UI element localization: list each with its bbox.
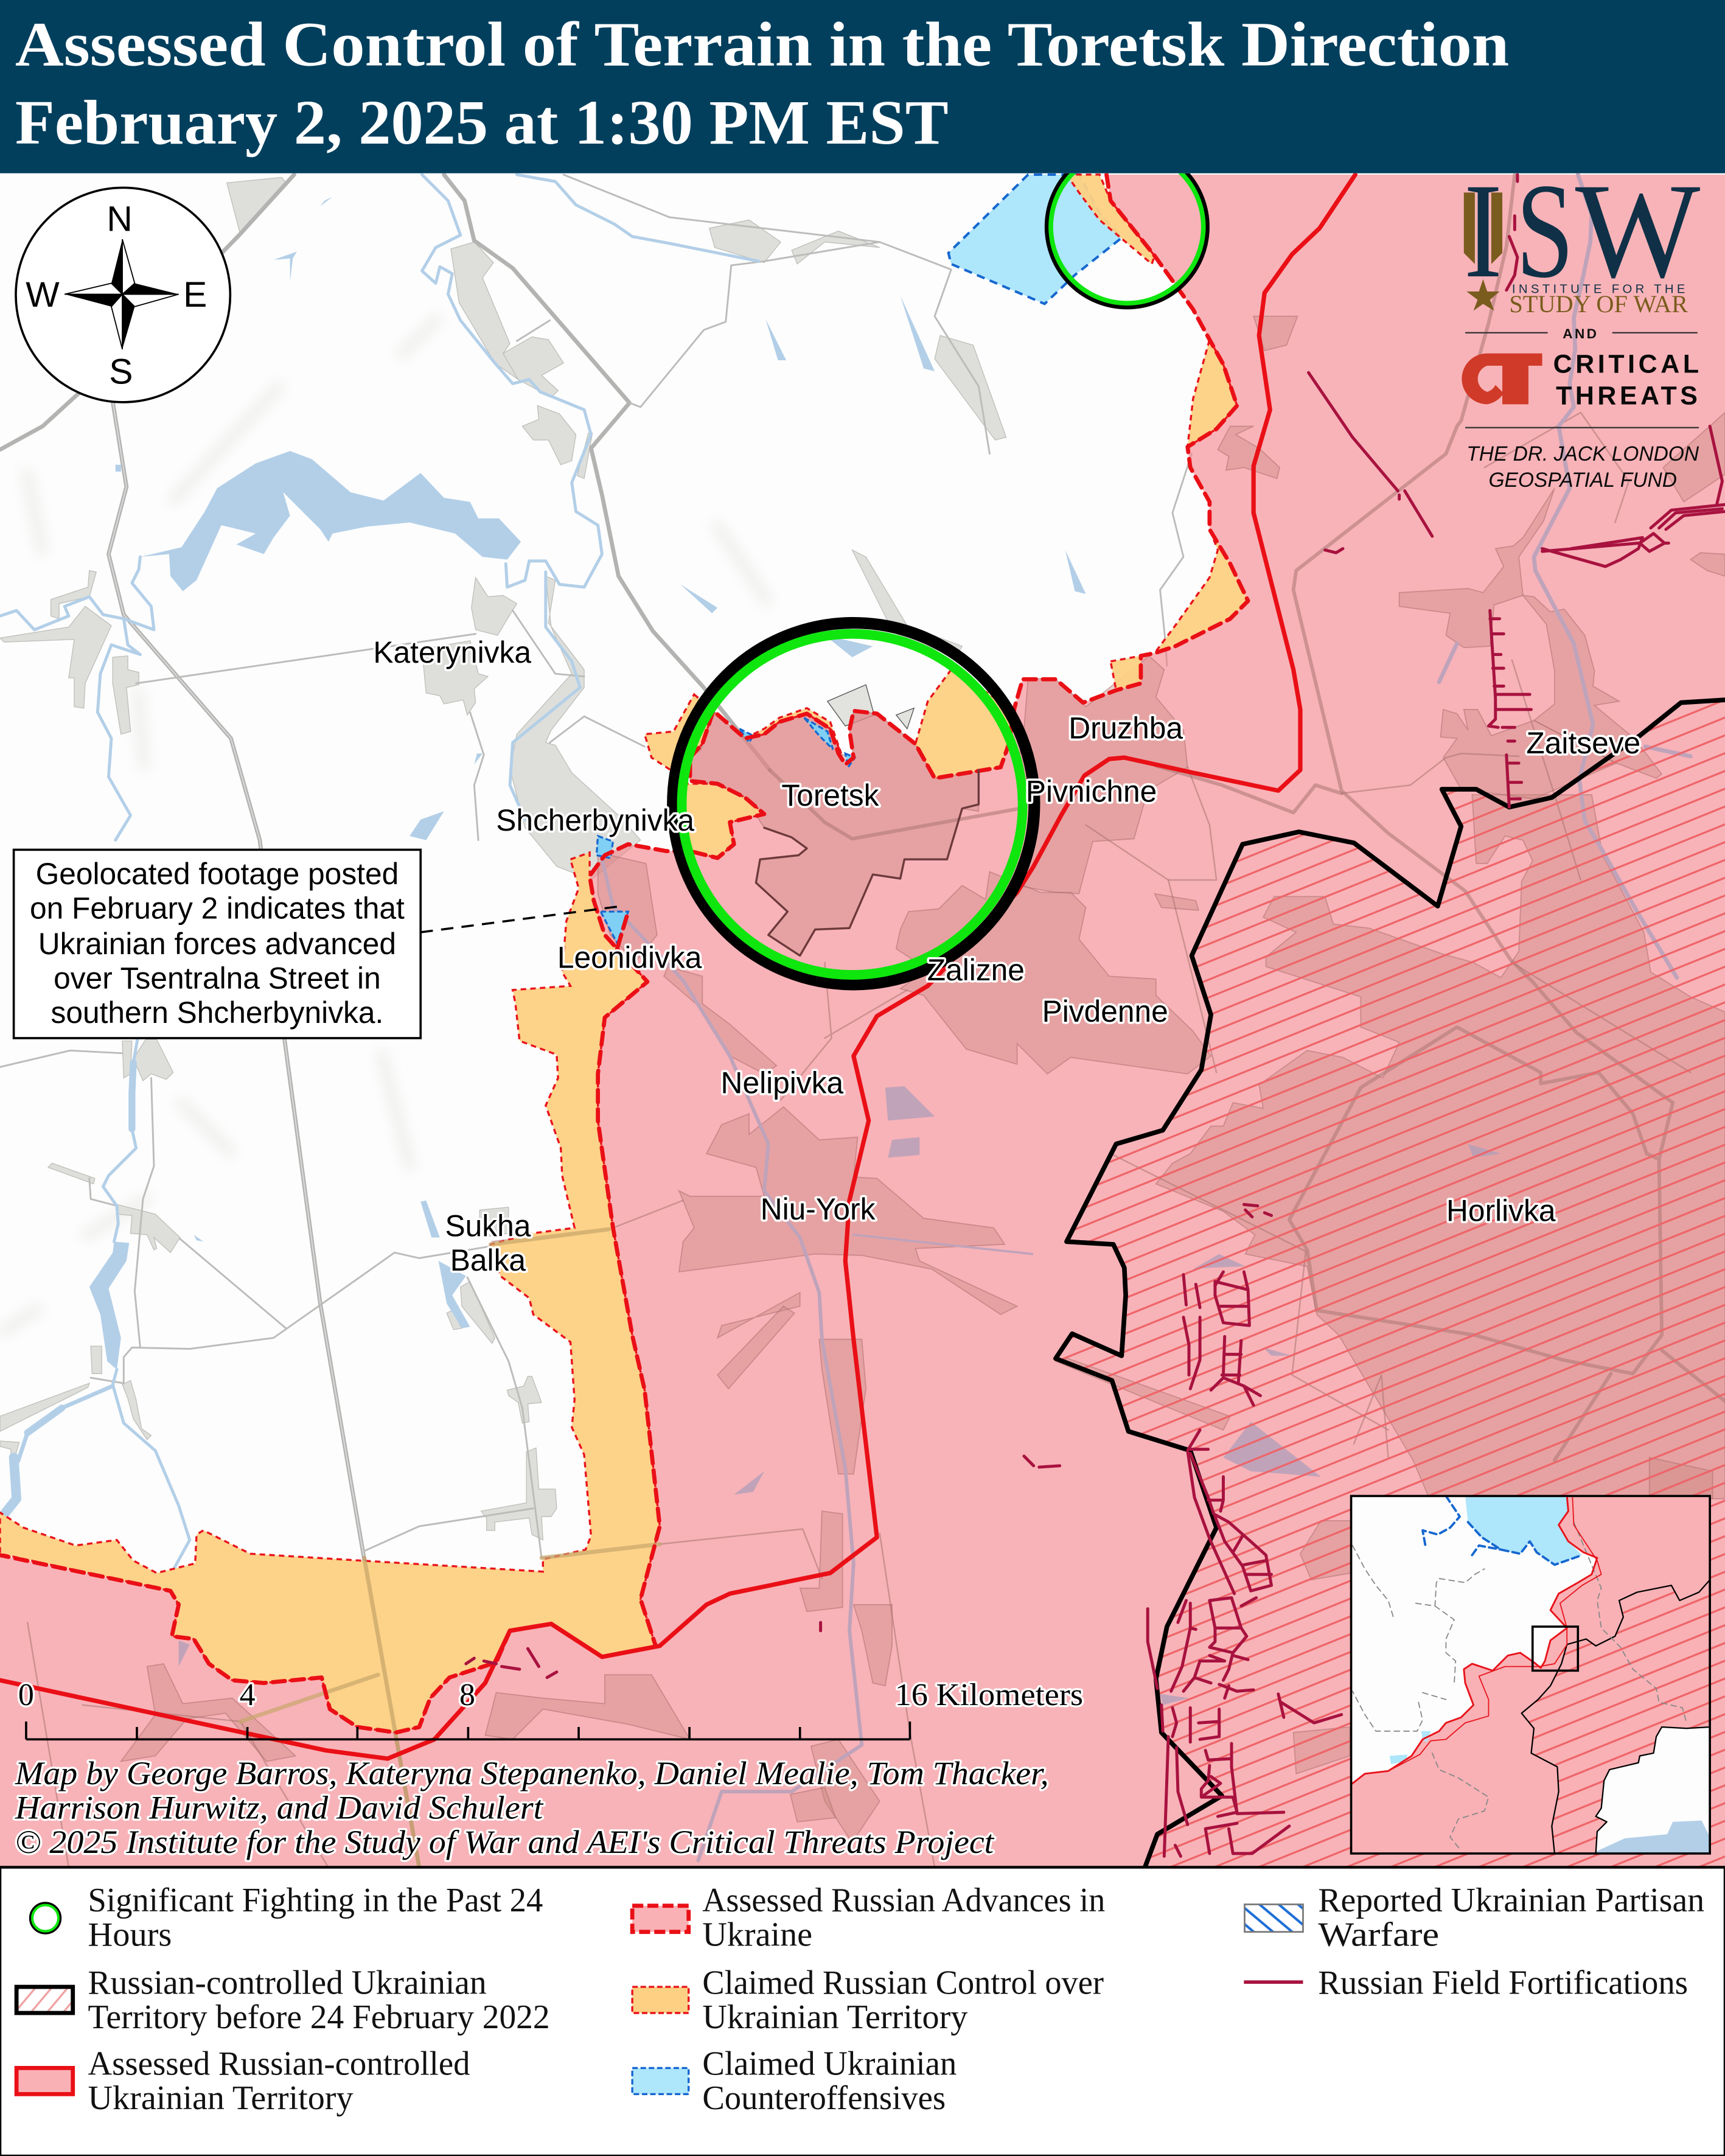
panel: assessed Russian-controlled territory — [0, 175, 1725, 1867]
road across claimed zone — [240, 1229, 660, 1867]
legend: assessed advances: Assessed Russian Advances in — [702, 1882, 1105, 1919]
settlement labels: Pivnichne — [1026, 774, 1157, 808]
compass: E — [183, 275, 207, 315]
logo: Jack London fund: THE DR. JACK LONDON — [1466, 442, 1699, 466]
scale bar: 16 Kilometers — [895, 1678, 1083, 1712]
legend: partisan warfare — [1244, 1882, 1704, 1953]
Toretsk urban boundary — [756, 770, 978, 955]
logo: Critical Threats — [1462, 349, 1699, 410]
panel: Russian-controlled territory before 24 February 2022 — [1056, 700, 1725, 1867]
map attribution: Map by George Barros, Kateryna Stepanenko, Daniel Mealie, Tom Thacker, — [15, 1755, 1049, 1791]
panel: claimed Russian control — [0, 175, 1248, 1732]
date subtitle: February 2, 2025 at 1:30 PM EST — [15, 88, 949, 158]
callout: geolocated footage: Ukrainian forces advanced — [38, 927, 396, 961]
callout: geolocated footage: southern Shcherbynivka. — [51, 996, 383, 1030]
legend: claimed counteroffensives: Counteroffensives — [702, 2079, 946, 2117]
logo: Critical Threats: THREATS — [1556, 381, 1698, 410]
logo: ISW: S — [1516, 156, 1574, 306]
settlement labels: Katerynivka — [373, 635, 531, 669]
legend: assessed Russian-controlled: Ukrainian Territory — [88, 2079, 354, 2117]
settlement labels — [373, 635, 1640, 1277]
callout: geolocated footage: Geolocated footage posted — [36, 857, 399, 891]
settlement labels: Zalizne — [927, 953, 1025, 987]
scale bar: 4 — [240, 1678, 256, 1712]
legend: significant fighting — [30, 1882, 543, 1953]
compass — [16, 187, 230, 402]
scale bar — [18, 1678, 1083, 1739]
scale bar: 8 — [459, 1678, 475, 1712]
settlement labels: Shcherbynivka — [496, 803, 694, 837]
roads — [0, 175, 770, 1867]
callout: geolocated footage — [14, 849, 420, 1038]
legend: assessed Russian-controlled: Assessed Russian-controlled — [88, 2045, 470, 2083]
logo: Critical Threats: CRITICAL — [1553, 349, 1699, 379]
compass: W — [26, 275, 60, 315]
settlement labels: Sukha — [445, 1209, 531, 1243]
legend: partisan warfare: Warfare — [1318, 1916, 1439, 1953]
legend: significant fighting: Significant Fighting in the Past 24 — [88, 1882, 543, 1919]
logo: Jack London fund — [1465, 427, 1699, 492]
legend: claimed counteroffensives: Claimed Ukrainian — [702, 2045, 957, 2083]
legend: claimed counteroffensives — [632, 2045, 957, 2117]
panel: claimed Ukrainian counteroffensive — [949, 175, 1121, 304]
legend: partisan warfare: Reported Ukrainian Partisan — [1318, 1882, 1704, 1919]
logo: ISW: I — [1464, 156, 1502, 306]
map attribution: Harrison Hurwitz, and David Schulert — [15, 1789, 544, 1826]
title: Assessed Control of Terrain in the Toretsk Direction — [15, 9, 1509, 79]
legend: field fortifications: Russian Field Fortifications — [1318, 1964, 1688, 2001]
rivers and lakes — [0, 175, 1086, 1568]
Russian field fortifications — [466, 175, 1725, 1856]
circle: significant fighting near Toretsk — [673, 623, 1034, 985]
settlement labels: Pivdenne — [1042, 994, 1168, 1028]
logo: and divider: AND — [1563, 326, 1598, 341]
callout: geolocated footage: on February 2 indicates that — [30, 891, 405, 925]
settlement labels: Toretsk — [781, 778, 879, 812]
line: assessed Russian-controlled boundary — [0, 175, 1355, 1759]
legend: assessed advances — [632, 1882, 1105, 1953]
legend: significant fighting: Hours — [88, 1916, 172, 1953]
map attribution: © 2025 Institute for the Study of War and AEI's Critical Threats Project — [15, 1824, 995, 1860]
compass: N — [106, 200, 133, 239]
legend: pre-2022 territory: Russian-controlled Ukrainian — [88, 1964, 487, 2001]
logo: ISW: W — [1575, 156, 1700, 306]
map attribution — [15, 1755, 1049, 1860]
legend: pre-2022 territory — [16, 1964, 550, 2036]
settlement labels: Leonidivka — [557, 941, 702, 975]
scale bar: 0 — [18, 1678, 34, 1712]
callout: geolocated footage: over Tsentralna Street in — [54, 961, 381, 996]
small blue counterattack areas — [596, 717, 855, 943]
water bodies in occupied territory — [179, 1086, 1501, 1705]
logo: Jack London fund: GEOSPATIAL FUND — [1488, 469, 1677, 492]
logo: ISW: INSTITUTE FOR THE — [1512, 282, 1685, 296]
settlement labels: Balka — [450, 1243, 526, 1277]
settlement labels: Druzhba — [1068, 711, 1183, 745]
callout leader line — [420, 906, 621, 932]
legend: assessed Russian-controlled — [16, 2045, 470, 2117]
logo: ISW: STUDY OF WAR — [1509, 290, 1688, 318]
map: terrain and control — [0, 147, 1725, 1870]
terrain hillshade — [0, 316, 770, 1334]
settlements on open ground — [0, 177, 1006, 1540]
settlements within occupied territory — [121, 316, 1725, 1843]
legend — [0, 1866, 1725, 2155]
circle: significant fighting in the north — [1047, 147, 1207, 307]
legend: pre-2022 territory: Territory before 24 February 2022 — [88, 1998, 550, 2036]
logos — [1462, 156, 1700, 492]
logo: ISW — [1464, 156, 1700, 318]
settlement labels: Horlivka — [1446, 1193, 1556, 1227]
inset locator map — [1351, 1496, 1710, 1854]
settlement labels: Zaitseve — [1526, 726, 1640, 760]
roads within occupied territory — [363, 173, 1725, 1560]
legend: claimed Russian control: Claimed Russian Control over — [702, 1964, 1104, 2001]
legend: claimed Russian control: Ukrainian Territory — [702, 1998, 968, 2036]
line: assessed Russian advances — [0, 175, 1248, 1732]
settlement labels: Niu-York — [761, 1192, 876, 1226]
compass: S — [109, 352, 133, 391]
settlement labels: Nelipivka — [721, 1066, 843, 1100]
rivers within occupied territory — [598, 175, 1691, 1860]
legend: claimed Russian control — [632, 1964, 1104, 2036]
header — [0, 0, 1725, 173]
legend: assessed advances: Ukraine — [702, 1916, 812, 1953]
